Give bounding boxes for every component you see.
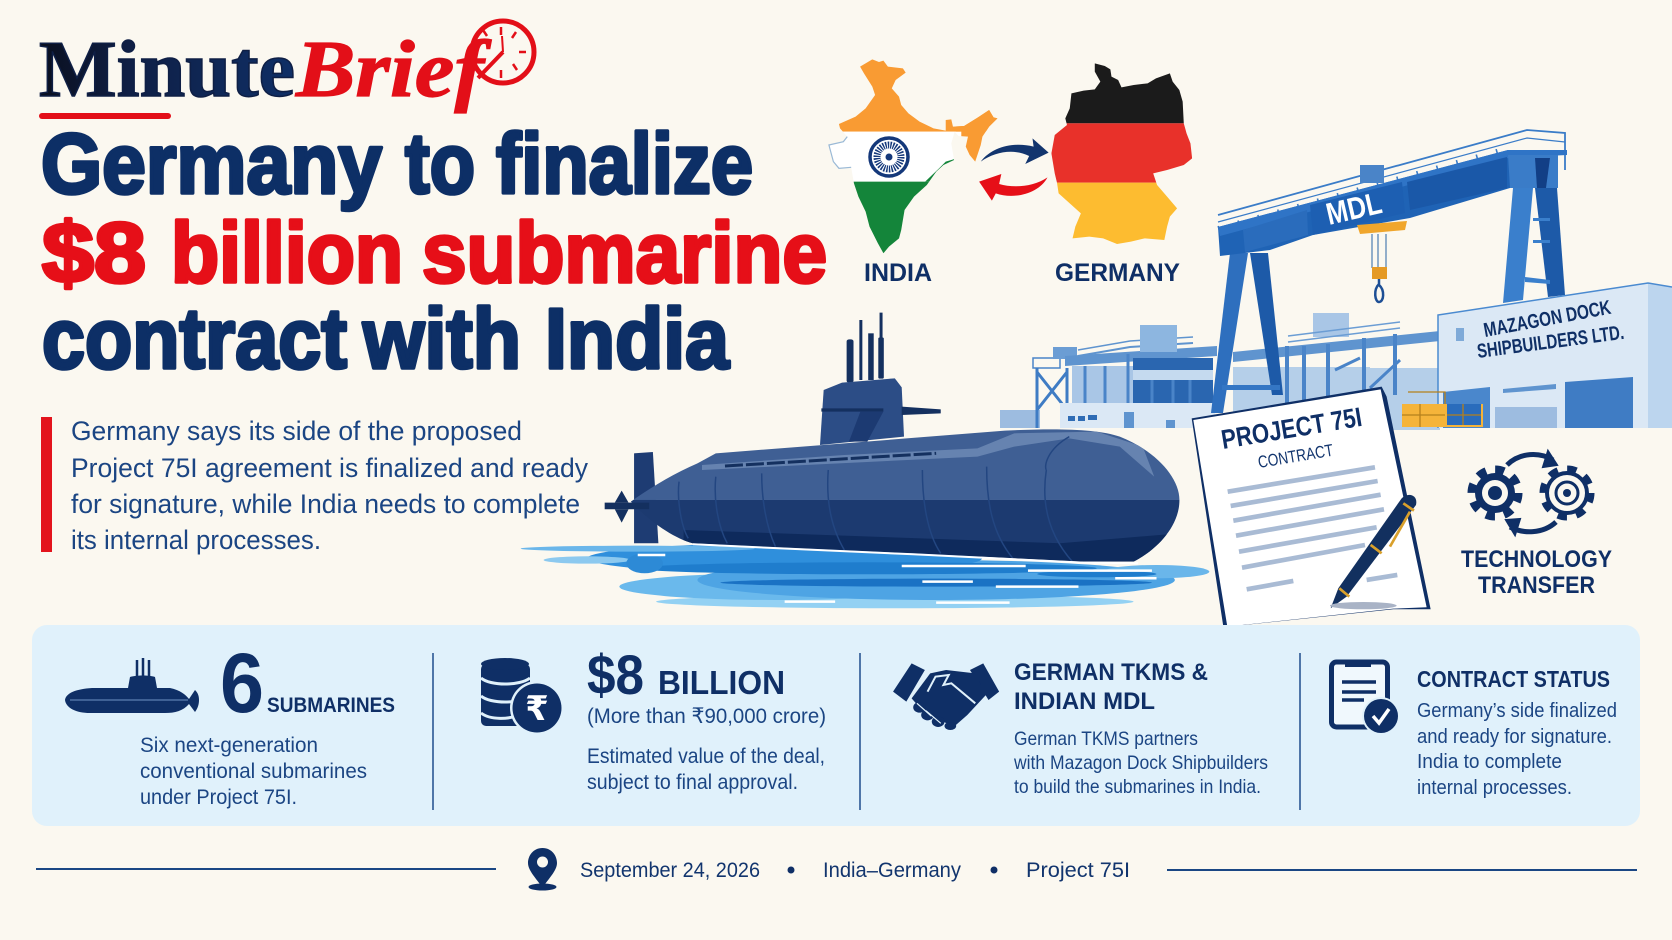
panel background: [32, 625, 1640, 826]
line: and ready for signature.: [1417, 726, 1612, 748]
pen: [1331, 495, 1416, 608]
rudder: [634, 452, 658, 543]
title line 1: Germany: [41, 117, 382, 212]
unit: billion: BILLION: [658, 664, 785, 701]
illustration: Project 75I contract and pen: [1192, 387, 1431, 627]
line: conventional submarines: [140, 760, 367, 783]
unit: submarines: SUBMARINES: [267, 694, 395, 717]
description: [1417, 700, 1617, 799]
big number 6: 6: [220, 636, 264, 730]
title line 3: with: [362, 292, 521, 387]
illustration: shipyard scene: [1000, 130, 1672, 430]
arrow: India to Germany: [981, 138, 1049, 164]
label line 2: TRANSFER: [1478, 572, 1595, 599]
intro line 4: its internal processes.: [71, 525, 321, 555]
masts: [861, 313, 881, 380]
hull: [629, 427, 1184, 567]
red accent bar: [41, 417, 52, 552]
title line 3: [42, 292, 730, 387]
title line 3: India: [545, 292, 730, 387]
description: [587, 745, 825, 794]
fact: contract status: [1332, 662, 1617, 799]
crane girder: [1218, 150, 1567, 256]
line: German TKMS partners: [1014, 728, 1198, 750]
title line 2: billion: [171, 206, 403, 301]
line: with Mazagon Dock Shipbuilders: [1013, 752, 1268, 774]
fact: partners: [893, 659, 1268, 798]
heading: CONTRACT STATUS: [1417, 666, 1610, 692]
title line 1: [41, 117, 753, 212]
rupee equivalent: (More than ₹90,000 crore): [587, 704, 826, 728]
building sign line 1: MAZAGON DOCK: [1482, 297, 1613, 342]
icon: document with check: [1332, 662, 1400, 735]
contract subheading: CONTRACT: [1257, 441, 1335, 472]
intro line 1: Germany says its side of the proposed: [71, 416, 522, 446]
line: subject to final approval.: [587, 771, 798, 794]
separator dot: [990, 866, 998, 874]
big value $8: $8: [587, 643, 644, 706]
map: India in flag colours: [828, 60, 998, 254]
crane trolley: [1357, 221, 1407, 234]
description: [140, 734, 367, 809]
title: [41, 117, 827, 387]
crane label MDL: MDL: [1323, 185, 1385, 232]
line: Six next-generation: [140, 734, 318, 757]
icon: stopwatch clock: [472, 21, 534, 83]
icon: handshake: [893, 663, 999, 730]
footer: [36, 848, 1637, 890]
contract sheet: [1192, 387, 1431, 627]
title line 2: submarine: [422, 206, 827, 301]
title line 2: $8: [42, 206, 146, 301]
contract text lines: [1228, 467, 1397, 589]
intro text block: [41, 416, 589, 555]
icon: submarine: [65, 658, 199, 713]
crane label panel: [1310, 182, 1405, 235]
logo wordmark: Minute: Minute: [39, 26, 295, 114]
illustration: submarine: [605, 313, 1184, 567]
gear outline: [1544, 470, 1590, 516]
title line 2: [42, 206, 827, 301]
label line 1: TECHNOLOGY: [1461, 546, 1612, 573]
separator dot: [788, 866, 794, 874]
title line 1: finalize: [496, 117, 753, 212]
logo wordmark: Brief: Brief: [295, 26, 492, 114]
title line 1: to: [405, 117, 475, 212]
rotation arrow bottom: [1506, 519, 1556, 535]
crane left legs: [1211, 253, 1248, 413]
crane right legs: [1535, 188, 1565, 297]
footer project: Project 75I: [1026, 859, 1130, 882]
label: GERMANY: GERMANY: [1055, 259, 1180, 287]
gantry crane: [1211, 130, 1567, 413]
logo underline: [39, 113, 171, 119]
fact: deal value: [481, 643, 826, 794]
icon: location pin: [528, 848, 557, 890]
heading line 1: GERMAN TKMS &: [1014, 659, 1208, 686]
conning tower: [820, 378, 904, 445]
factory: right block: [1233, 313, 1440, 430]
arrow: Germany to India: [979, 174, 1048, 201]
footer topic: India–Germany: [823, 859, 961, 882]
Mazagon Dock building: [1402, 283, 1672, 428]
footer date: September 24, 2026: [580, 859, 760, 882]
intro line 3: for signature, while India needs to complete: [71, 489, 580, 519]
rotation arrow top: [1507, 451, 1557, 467]
description: [1013, 728, 1268, 798]
crane railing: [1218, 130, 1565, 232]
label: technology transfer: [1461, 546, 1612, 599]
icon: coins and rupee: [481, 658, 564, 735]
crane hook: [1372, 234, 1387, 302]
propeller: [605, 503, 649, 509]
icon: technology transfer gears: [1472, 451, 1590, 535]
factory: left block: [1000, 325, 1217, 428]
title line 3: contract: [42, 292, 347, 387]
intro line 2: Project 75I agreement is finalized and ready: [71, 453, 589, 483]
line: Estimated value of the deal,: [587, 745, 825, 768]
line: under Project 75I.: [140, 786, 297, 809]
panel: key facts: [32, 625, 1640, 826]
line: India to complete: [1417, 751, 1562, 773]
icon: coins and rupee: ₹: [525, 690, 549, 728]
logo: MinuteBrief: [39, 21, 534, 119]
gear solid: [1472, 470, 1518, 516]
line: internal processes.: [1417, 777, 1572, 799]
building sign line 2: SHIPBUILDERS LTD.: [1476, 322, 1625, 363]
line: to build the submarines in India.: [1014, 776, 1261, 798]
heading line 2: INDIAN MDL: [1014, 688, 1155, 715]
hull waterline highlight: [693, 544, 1138, 563]
water under submarine: [521, 543, 1209, 608]
icon: Ashoka chakra: [870, 138, 908, 176]
contract heading: PROJECT 75I: [1219, 402, 1364, 455]
label: INDIA: INDIA: [864, 259, 932, 287]
line: Germany’s side finalized: [1417, 700, 1617, 722]
fact: submarines: [65, 636, 395, 809]
yellow crate: [1402, 392, 1483, 427]
map: Germany in flag colours: [1052, 64, 1192, 244]
